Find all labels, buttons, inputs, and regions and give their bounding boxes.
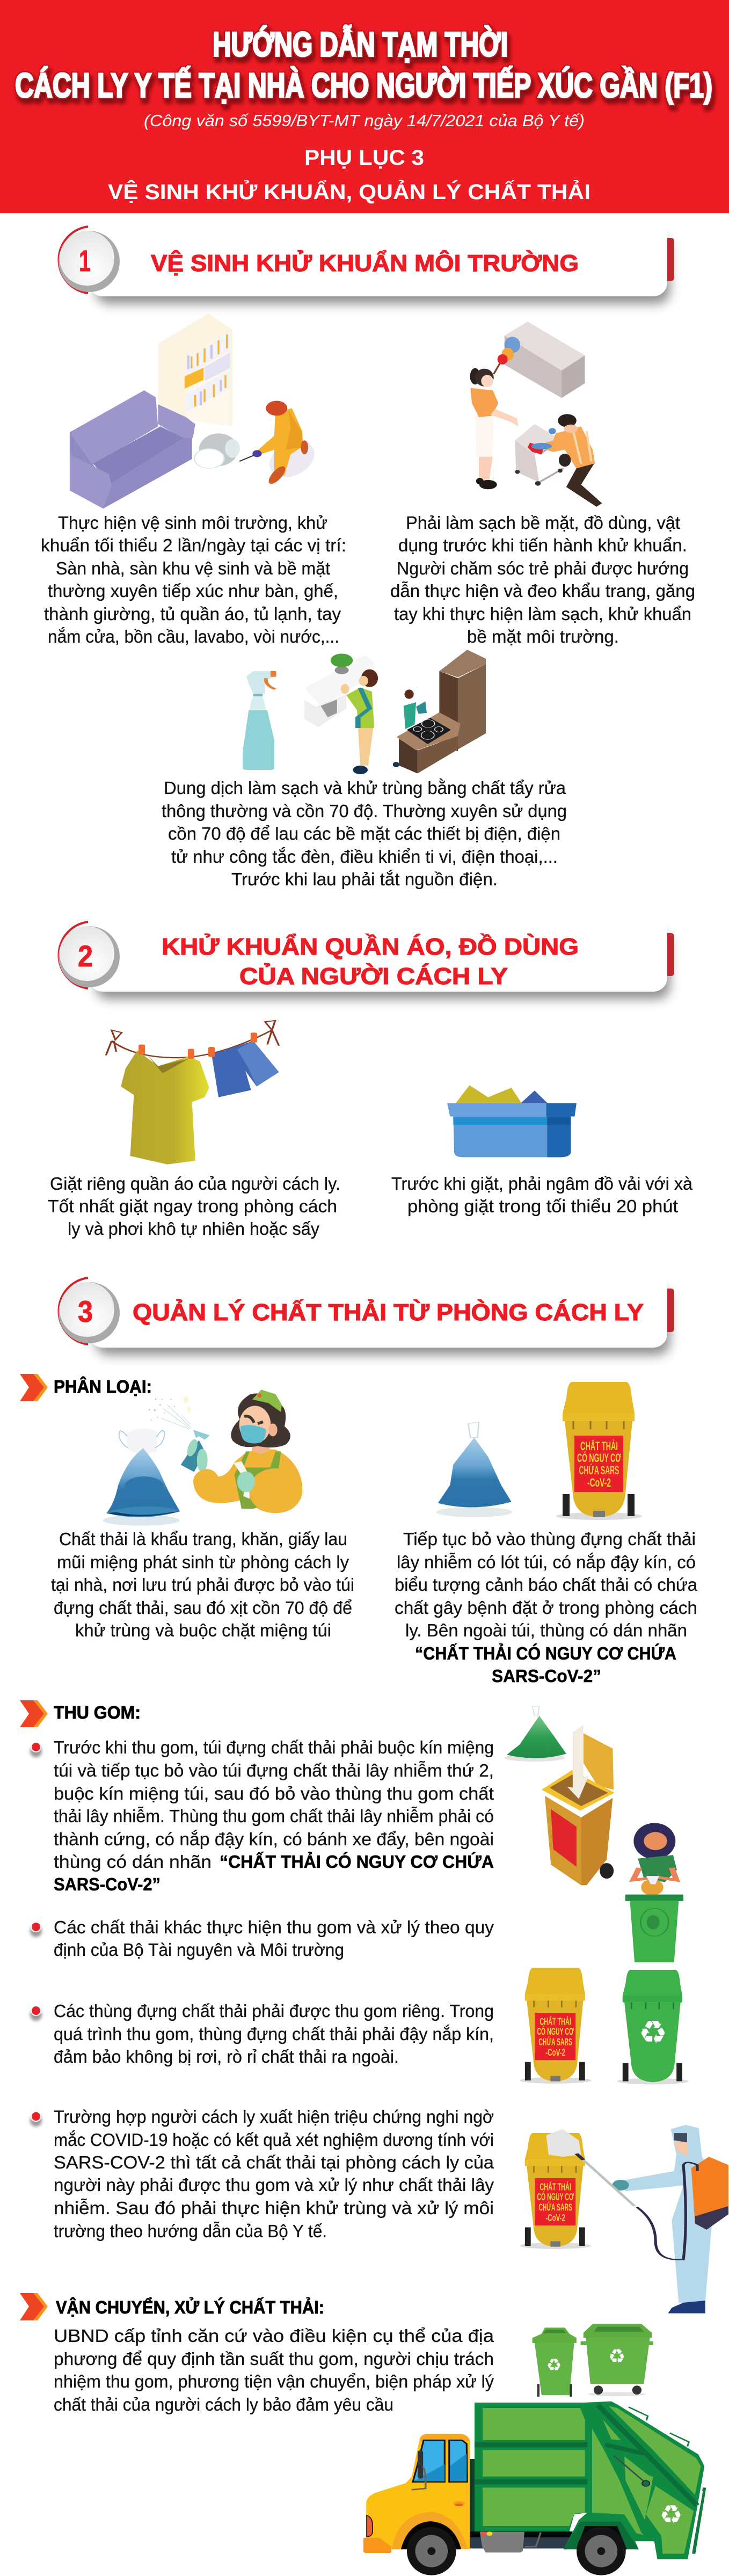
section 3 classification text: right: biểu tượng cảnh báo chất thải có chứa bbox=[395, 1575, 698, 1595]
subheading: collection: THU GOM: bbox=[54, 1702, 141, 1722]
section 1 text: right: Phải làm sạch bề mặt, đồ dùng, vật bbox=[406, 513, 680, 533]
appendix heading: VỆ SINH KHỬ KHUẨN, QUẢN LÝ CHẤT THẢI bbox=[108, 179, 591, 204]
transport text: nhiệm thu gom, phương tiện vận chuyển, biện pháp xử lý bbox=[54, 2371, 494, 2391]
collection text 1: “CHẤT THẢI CÓ NGUY CƠ CHỨA bbox=[220, 1852, 494, 1872]
subheading: transport and treatment: VẬN CHUYỂN, XỬ LÝ CHẤT THẢI: bbox=[56, 2297, 324, 2317]
illustration: two green wheeled bins: ♻ bbox=[608, 2346, 625, 2368]
collection text 4: người này phải được thu gom và xử lý như chất thải lây bbox=[54, 2175, 494, 2195]
collection text 4 bbox=[54, 2107, 494, 2241]
bullet 2 bbox=[30, 1922, 42, 1937]
illustration: clothes on a line bbox=[106, 1021, 279, 1165]
subheading: classification bbox=[20, 1374, 152, 1401]
section 1 text: centre: cồn 70 độ để lau các bề mặt các thiết bị điện, điện bbox=[168, 824, 560, 843]
section 1 text: left: thành giường, tủ quần áo, tủ lạnh, tay bbox=[44, 604, 341, 624]
subheading: collection bbox=[20, 1700, 141, 1727]
appendix heading bbox=[108, 146, 591, 204]
section 3 classification text: right: “CHẤT THẢI CÓ NGUY CƠ CHỨA bbox=[415, 1643, 676, 1663]
section 1 heading banner: 1 bbox=[79, 244, 91, 278]
section 3 classification text: right bbox=[395, 1529, 698, 1686]
collection text 4: SARS-COV-2 thì tất cả chất thải tại phòng cách ly của bbox=[54, 2152, 494, 2172]
subtitle: official document reference: (Công văn số 5599/BYT-MT ngày 14/7/2021 của Bộ Y tế) bbox=[144, 111, 585, 130]
section 3 classification text: left bbox=[51, 1529, 354, 1640]
section 1 text: right bbox=[390, 513, 695, 646]
collection text 1: buộc kín miệng túi, sau đó bỏ vào thùng thu gom chất bbox=[54, 1784, 494, 1803]
illustration: garbage truck: ♻ bbox=[659, 2500, 683, 2530]
section 3 classification text: left: mũi miệng phát sinh từ phòng cách ly bbox=[57, 1552, 349, 1572]
section 1 text: left: Sàn nhà, sàn khu vệ sinh và bề mặt bbox=[56, 558, 330, 578]
title: HƯỚNG DẪN TẠM THỜI bbox=[213, 25, 508, 63]
illustration: yellow bin, separate collection: CÓ NGUY CƠ bbox=[537, 2026, 574, 2037]
header banner bbox=[0, 0, 729, 213]
collection text 1: túi và tiếp tục bỏ vào túi đựng chất thải lây nhiễm thứ 2, bbox=[54, 1760, 494, 1780]
transport text bbox=[54, 2326, 494, 2414]
collection text 3 bbox=[54, 2001, 494, 2066]
illustration: spray bottle and cleaners in kitchen bbox=[243, 650, 486, 774]
section 3 heading banner: 3 bbox=[78, 1294, 93, 1328]
section 3 classification text: right: ly. Bên ngoài túi, thùng có dán nhãn bbox=[405, 1620, 687, 1640]
section 1 text: left: khuẩn tối thiểu 2 lần/ngày tại các vị trí: bbox=[41, 535, 346, 555]
section 1 text: left: nắm cửa, bồn cầu, lavabo, vòi nước,... bbox=[48, 627, 339, 646]
section 3 classification text: right: SARS-CoV-2” bbox=[492, 1666, 601, 1686]
section 3 classification text: left: tại nhà, nơi lưu trú phải được bỏ vào túi bbox=[51, 1575, 354, 1595]
section 1 text: centre: Trước khi lau phải tắt nguồn điện. bbox=[231, 869, 498, 889]
section 3 classification text: left: đựng chất thải, sau đó xịt cồn 70 độ để bbox=[54, 1598, 352, 1618]
section 1 text: centre bbox=[162, 778, 567, 889]
collection text 2: định của Bộ Tài nguyên và Môi trường bbox=[54, 1940, 344, 1960]
section 1 text: right: dụng trước khi tiến hành khử khuẩn. bbox=[398, 535, 687, 555]
section 2 text: left: Giặt riêng quần áo của người cách ly. bbox=[50, 1174, 340, 1194]
bullet 1 bbox=[30, 1742, 42, 1757]
illustration: two green wheeled bins bbox=[533, 2324, 653, 2397]
illustration: yellow bin being disinfected: CHẤT THẢI bbox=[540, 2181, 571, 2193]
section 2 text: left: Tốt nhất giặt ngay trong phòng cách bbox=[48, 1196, 337, 1216]
collection text 1: thành cứng, có nắp đậy kín, có bánh xe đẩy, bên ngoài bbox=[54, 1829, 494, 1849]
section 1 text: right: Người chăm sóc trẻ phải được hướng bbox=[397, 558, 689, 578]
collection text 3: quá trình thu gom, thùng đựng chất thải phải đậy nắp kín, bbox=[54, 2024, 494, 2044]
bullet 3 bbox=[30, 2005, 42, 2021]
illustration: yellow bin being disinfected: CHỨA SARS bbox=[538, 2201, 572, 2213]
illustration: woman spraying tied waste bag bbox=[103, 1389, 302, 1526]
section 1 text: left bbox=[41, 513, 346, 646]
section 1 text: centre: thông thường và cồn 70 độ. Thường xuyên sử dụng bbox=[162, 801, 567, 821]
section 1 text: centre: tử như công tắc đèn, điều khiển ti vi, điện thoại,... bbox=[171, 847, 558, 867]
illustration: yellow bin, separate collection: CHẤT THẢI bbox=[540, 2016, 571, 2027]
illustration: bag going into open yellow bin bbox=[505, 1706, 615, 1885]
transport text: UBND cấp tỉnh căn cứ vào điều kiện cụ thể của địa bbox=[54, 2326, 494, 2346]
section 1 text: right: dẫn thực hiện và đeo khẩu trang, găng bbox=[390, 581, 695, 601]
illustration: garbage truck bbox=[363, 2402, 704, 2575]
illustration: green recycling bin: ♻ bbox=[638, 2014, 667, 2051]
illustration: yellow hazardous waste bin: CHỨA SARS bbox=[579, 1464, 619, 1477]
section 1 text: left: Thực hiện vệ sinh môi trường, khử bbox=[58, 513, 327, 533]
transport text: chất thải của người cách ly bảo đảm yêu cầu bbox=[54, 2395, 393, 2414]
transport text: phương để quy định tần suất thu gom, người chịu trách bbox=[54, 2349, 494, 2369]
subheading: transport and treatment bbox=[20, 2293, 324, 2320]
illustration: yellow hazardous waste bin: CÓ NGUY CƠ bbox=[577, 1451, 621, 1465]
section 1 text: right: tay khi thực hiện làm sạch, khử khuẩn bbox=[394, 604, 691, 624]
collection text 2: Các chất thải khác thực hiện thu gom và xử lý theo quy bbox=[54, 1917, 494, 1937]
collection text 1: Trước khi thu gom, túi đựng chất thải phải buộc kín miệng bbox=[54, 1737, 494, 1757]
collection text 2 bbox=[54, 1917, 494, 1960]
illustration: soaking basket bbox=[447, 1085, 577, 1157]
section 2 heading banner: CỦA NGƯỜI CÁCH LY bbox=[239, 962, 508, 989]
section 1 text: right: bề mặt môi trường. bbox=[467, 627, 619, 646]
collection text 1: thùng có dán nhãn bbox=[54, 1852, 212, 1872]
illustration: yellow bin, separate collection: -CoV-2 bbox=[545, 2047, 565, 2058]
illustration: cleaning furniture surfaces bbox=[470, 322, 602, 507]
collection text 4: nhiễm. Sau đó phải thực hiện khử trùng và xử lý môi bbox=[54, 2198, 494, 2218]
section 2 heading banner: KHỬ KHUẨN QUẦN ÁO, ĐỒ DÙNG bbox=[162, 933, 579, 960]
section 2 text: right: phòng giặt trong tối thiểu 20 phút bbox=[407, 1196, 678, 1216]
section 2 heading banner bbox=[59, 919, 674, 999]
collection text 4: mắc COVID-19 hoặc có kết quả xét nghiệm dương tính với bbox=[54, 2130, 494, 2150]
collection text 1 bbox=[54, 1737, 494, 1894]
section 2 text: right bbox=[391, 1174, 693, 1216]
section 2 text: right: Trước khi giặt, phải ngâm đồ vải với xà bbox=[391, 1174, 693, 1194]
illustration: worker in protective suit spraying bbox=[546, 2125, 728, 2313]
section 3 classification text: right: lây nhiễm có lót túi, có nắp đậy kín, có bbox=[397, 1552, 696, 1572]
bullet 4 bbox=[30, 2111, 42, 2127]
illustration: disinfecting sofa and bookcase bbox=[70, 314, 322, 508]
collection text 4: trường theo hướng dẫn của Bộ Y tế. bbox=[54, 2221, 327, 2241]
illustration: green recycling bin bbox=[617, 1970, 689, 2084]
illustration: yellow bin, separate collection bbox=[520, 1968, 591, 2084]
illustration: yellow bin, separate collection: CHỨA SARS bbox=[538, 2036, 572, 2047]
section 3 classification text: right: Tiếp tục bỏ vào thùng đựng chất thải bbox=[403, 1529, 696, 1549]
illustration: yellow hazardous waste bin: -CoV-2 bbox=[587, 1476, 611, 1489]
appendix heading: PHỤ LỤC 3 bbox=[304, 146, 424, 170]
subheading: classification: PHÂN LOẠI: bbox=[54, 1377, 152, 1396]
illustration: yellow hazardous waste bin: CHẤT THẢI bbox=[580, 1439, 618, 1453]
section 1 text: centre: Dung dịch làm sạch và khử trùng bằng chất tẩy rửa bbox=[164, 778, 566, 798]
collection text 3: đảm bảo không bị rơi, rò rỉ chất thải ra ngoài. bbox=[54, 2047, 399, 2066]
collection text 1: SARS-CoV-2” bbox=[54, 1874, 161, 1894]
section 2 heading banner: 2 bbox=[78, 939, 93, 973]
collection text 3: Các thùng đựng chất thải phải được thu gom riêng. Trong bbox=[54, 2001, 494, 2021]
illustration: tied waste bag bbox=[436, 1422, 512, 1517]
collection text 4: Trường hợp người cách ly xuất hiện triệu chứng nghi ngờ bbox=[54, 2107, 494, 2127]
section 2 text: left bbox=[48, 1174, 340, 1239]
illustration: yellow bin being disinfected: CÓ NGUY CƠ bbox=[537, 2191, 574, 2202]
illustration: woman dropping waste into green bin bbox=[625, 1823, 683, 1962]
section 3 classification text: left: khử trùng và buộc chặt miệng túi bbox=[75, 1620, 331, 1640]
section 1 heading banner: VỆ SINH KHỬ KHUẨN MÔI TRƯỜNG bbox=[151, 249, 579, 276]
section 3 heading banner bbox=[59, 1275, 674, 1355]
section 1 heading banner bbox=[59, 223, 674, 304]
section 3 heading banner: QUẢN LÝ CHẤT THẢI TỪ PHÒNG CÁCH LY bbox=[133, 1299, 644, 1326]
title bbox=[15, 25, 712, 105]
illustration: yellow hazardous waste bin bbox=[556, 1382, 642, 1520]
section 3 classification text: left: Chất thải là khẩu trang, khăn, giấy lau bbox=[59, 1529, 347, 1549]
section 3 classification text: right: chất gây bệnh đặt ở trong phòng cách bbox=[395, 1598, 697, 1618]
collection text 1: thải lây nhiễm. Thùng thu gom chất thải lây nhiễm phải có bbox=[54, 1806, 494, 1826]
illustration: yellow bin being disinfected bbox=[520, 2133, 591, 2249]
section 1 text: left: thường xuyên tiếp xúc như bàn, ghế, bbox=[48, 581, 338, 601]
illustration: two green wheeled bins: ♻ bbox=[546, 2355, 562, 2375]
section 2 text: left: ly và phơi khô tự nhiên hoặc sấy bbox=[68, 1219, 319, 1239]
illustration: yellow bin being disinfected: -CoV-2 bbox=[545, 2212, 565, 2223]
